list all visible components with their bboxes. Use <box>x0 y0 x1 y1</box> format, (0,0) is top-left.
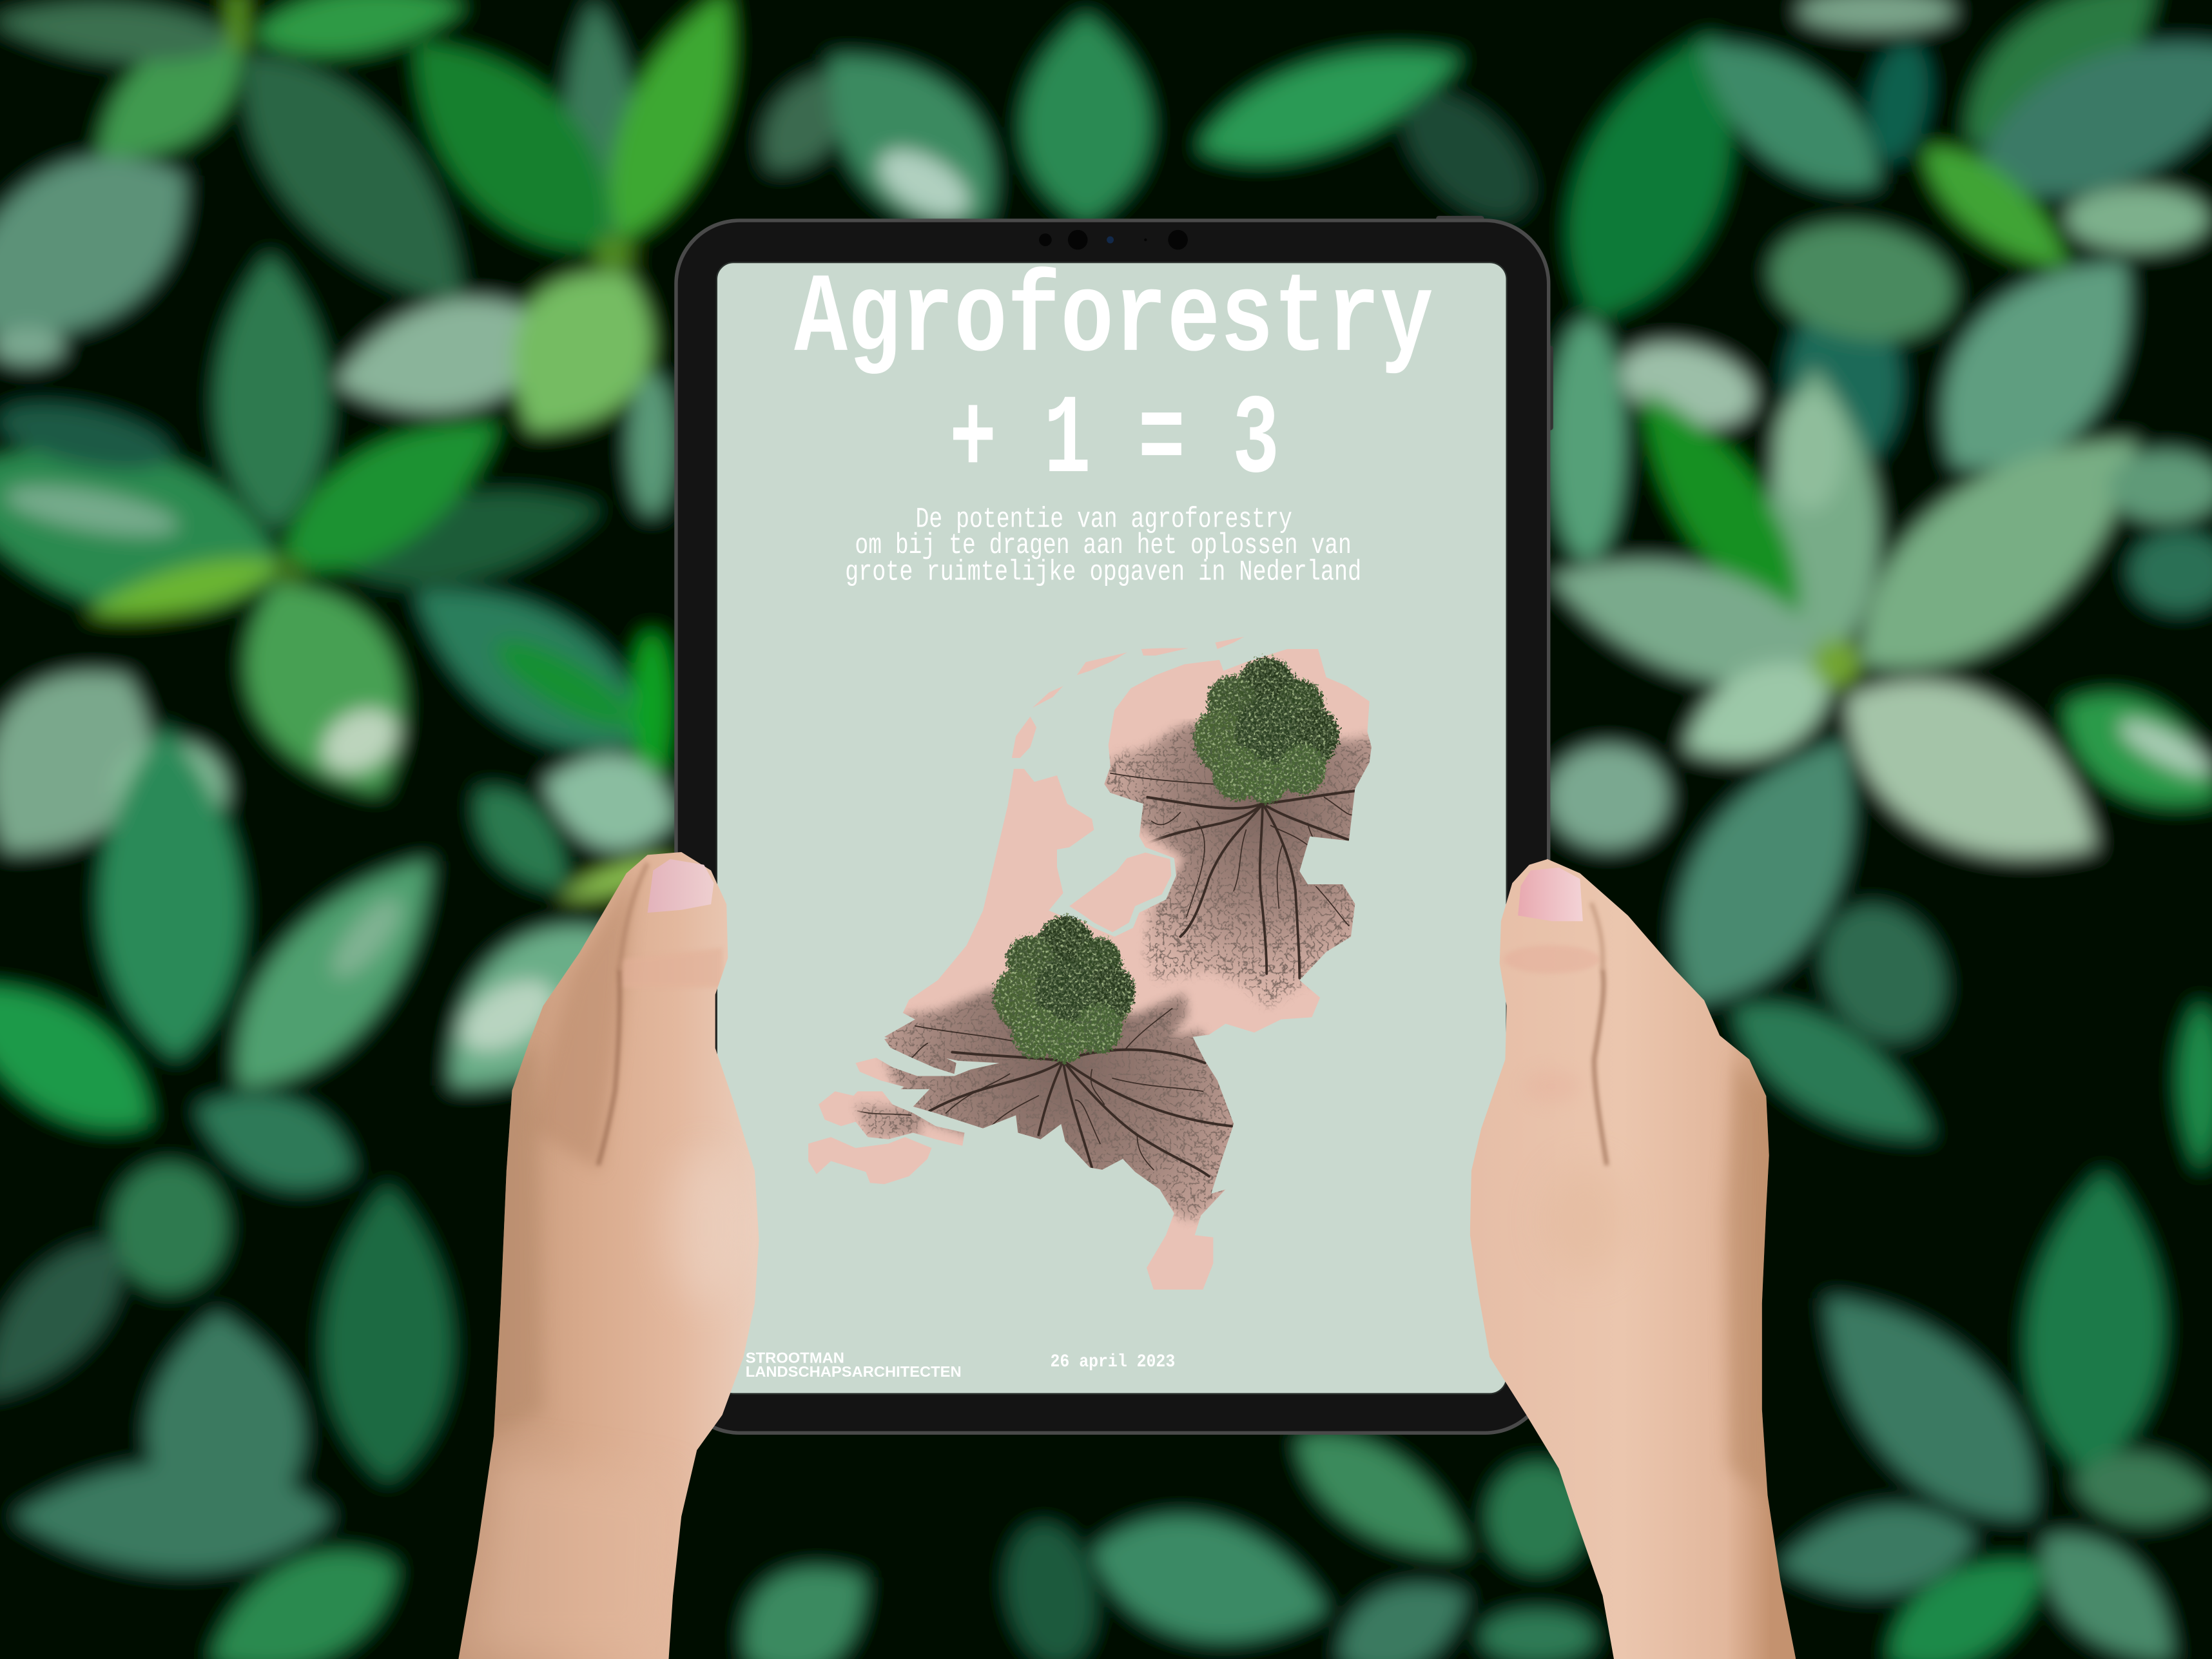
thumb nail <box>1518 868 1583 921</box>
Wadden islands <box>1012 637 1244 758</box>
tablet <box>674 216 1553 1435</box>
leaves, lower right <box>1632 706 1904 1036</box>
subtitle: grote ruimtelijke opgaven in Nederland <box>845 557 1361 589</box>
subtitle: om bij te dragen aan het oplossen van <box>855 530 1352 562</box>
leaves, top centre <box>742 48 873 190</box>
left hand <box>458 852 759 1659</box>
Flevoland <box>1069 853 1171 932</box>
thumb crease <box>1594 969 1607 1165</box>
tablet body <box>674 218 1550 1435</box>
Goeree strip <box>884 1034 956 1074</box>
firm name: LANDSCHAPSARCHITECTEN <box>746 1363 962 1380</box>
Zeeland islands <box>808 1058 964 1184</box>
tablet top button <box>1436 216 1484 223</box>
hand shading <box>1504 903 1771 1495</box>
root network, north-east <box>1105 719 1372 1011</box>
leaves, upper right <box>1529 7 1779 345</box>
leaves, bottom centre <box>1276 1406 1488 1585</box>
front cameras <box>1039 230 1188 249</box>
right hand <box>1470 859 1796 1659</box>
firm name: STROOTMAN <box>746 1349 844 1366</box>
date: 26 april 2023 <box>1051 1352 1175 1372</box>
equation heading: + 1 = 3 <box>949 377 1279 505</box>
leaves, upper left <box>71 10 267 191</box>
subtitle: De potentie van agroforestry <box>916 504 1292 536</box>
thumb crease <box>598 969 619 1165</box>
root network, south-west <box>852 984 1234 1225</box>
thumb nail <box>648 859 714 913</box>
screen <box>717 262 1507 1394</box>
tablet side buttons <box>1547 345 1553 431</box>
hand shading <box>465 864 745 1659</box>
leaves, lower left <box>95 724 246 1060</box>
tree, north-east <box>1194 657 1339 804</box>
tree, south-west <box>993 916 1135 1063</box>
map of the Netherlands <box>808 637 1390 1290</box>
land mass <box>884 649 1372 1290</box>
title: Agroforestry <box>794 256 1433 384</box>
subtitle <box>845 504 1361 589</box>
leaves, middle right <box>1550 320 1624 560</box>
firm name <box>746 1349 962 1380</box>
